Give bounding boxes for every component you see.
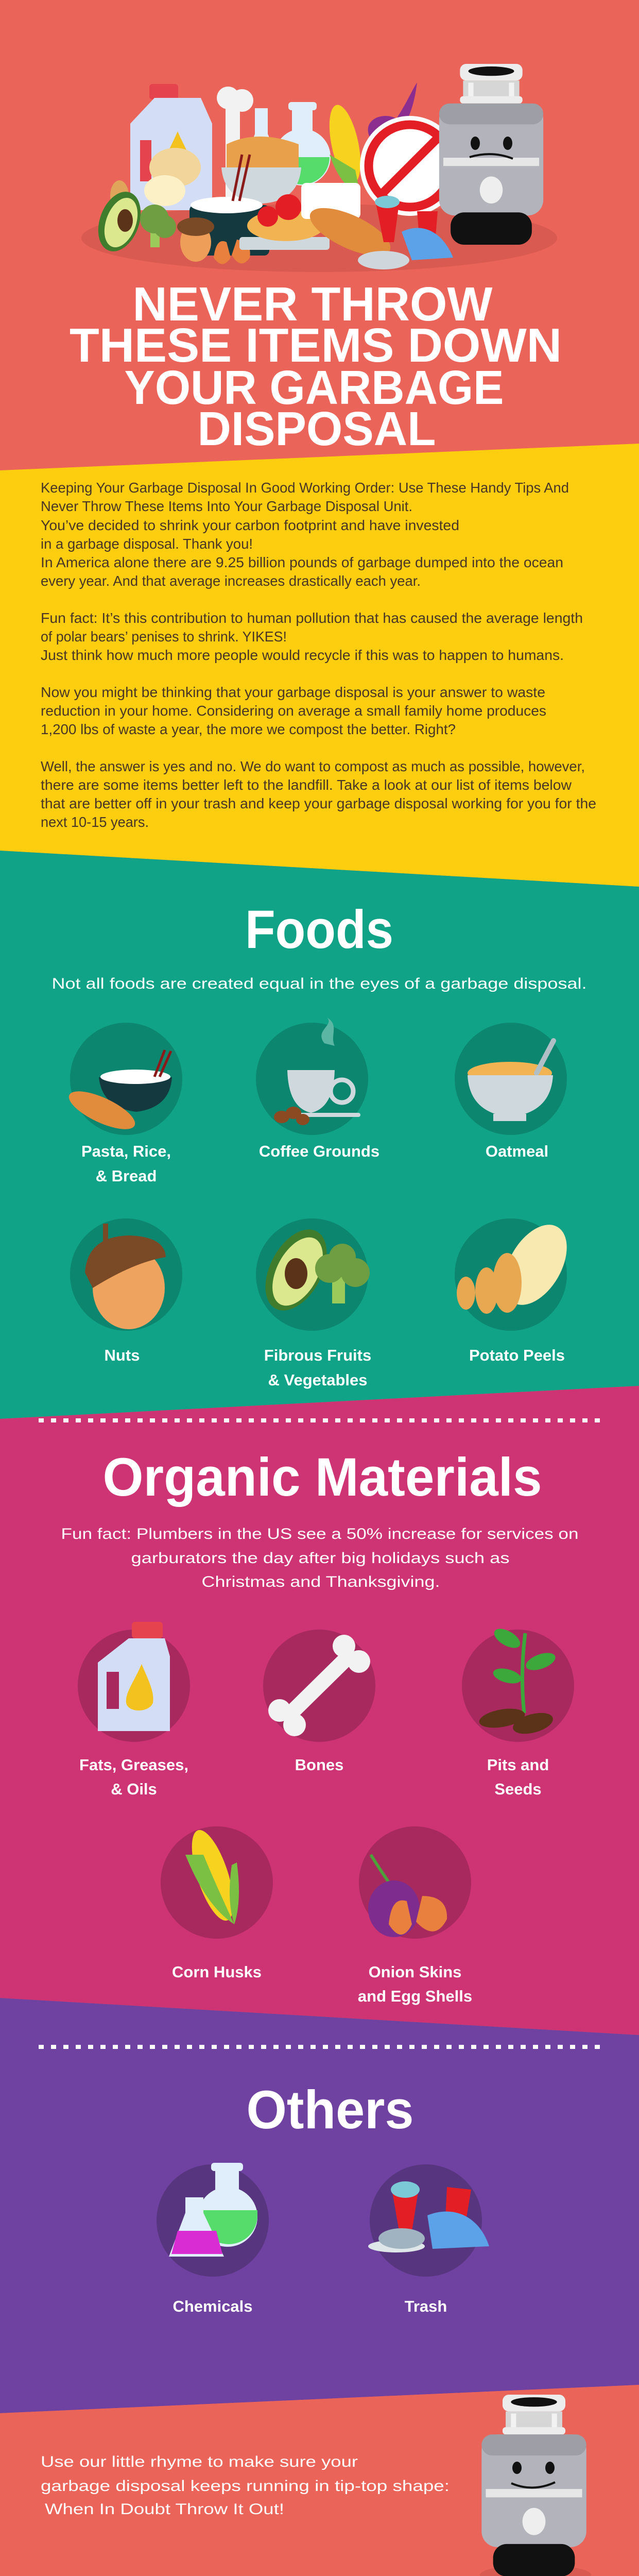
title: YOUR GARBAGE: [125, 361, 504, 414]
icon: coffee cup: [301, 183, 360, 219]
heading: Foods: Foods: [245, 900, 393, 960]
item: nuts: Nuts: [105, 1346, 140, 1364]
item: corn husks: Corn Husks: [172, 1963, 262, 1981]
intro text block: Well, the answer is yes and no. We do want to compost as much as possible, however,: [41, 758, 585, 774]
icon: avocado: [91, 186, 148, 257]
intro text block: [41, 480, 596, 830]
background: coral footer: [0, 2385, 639, 2576]
footer text: Use our little rhyme to make sure your: [41, 2453, 358, 2470]
intro text block: reduction in your home. Considering on average a small family home produces: [41, 703, 546, 719]
icon: bone: [217, 87, 253, 198]
icon: bread: [303, 198, 397, 265]
intro text block: Just think how much more people would recycle if this was to happen to humans.: [41, 647, 564, 663]
title: DISPOSAL: [198, 402, 436, 455]
icon: oatmeal bowl: [221, 137, 301, 204]
item: bones: [263, 1630, 375, 1774]
item: trash: Trash: [405, 2297, 447, 2315]
text: organic fun fact: [61, 1526, 579, 1590]
item: oatmeal: [455, 1023, 567, 1160]
item: onion skins and egg shells: and Egg Shells: [358, 1987, 472, 2005]
item: fibrous fruits vegetables: & Vegetables: [268, 1371, 367, 1389]
footer text: When In Doubt Throw It Out!: [45, 2501, 284, 2518]
item: onion skins and egg shells: [358, 1826, 472, 2005]
item: potato peels: Potato Peels: [469, 1346, 565, 1364]
item: pasta rice bread: Pasta, Rice,: [81, 1142, 171, 1160]
item: corn husks: [161, 1825, 273, 1981]
intro text block: Keeping Your Garbage Disposal In Good Working Order: Use These Handy Tips And: [41, 480, 569, 496]
item: nuts: [70, 1218, 182, 1364]
icon: flasks: [242, 102, 331, 185]
item: fats greases oils: & Oils: [111, 1780, 157, 1798]
item: fibrous fruits vegetables: [253, 1218, 371, 1389]
hero illustration: [81, 64, 557, 272]
intro text block: Fun fact: It’s this contribution to human pollution that has caused the average length: [41, 610, 583, 626]
icon: onion: [368, 82, 417, 144]
icon: spaghetti plate: [239, 194, 330, 250]
item: coffee grounds: Coffee Grounds: [259, 1142, 379, 1160]
icon: egg shells: [214, 240, 250, 264]
item: pasta rice bread: [64, 1023, 182, 1185]
item: pits and seeds: Seeds: [494, 1780, 542, 1798]
intro text block: there are some items better left to the landfill. Take a look at our list of items below: [41, 777, 572, 793]
item: trash: [368, 2164, 489, 2315]
intro text block: You’ve decided to shrink your carbon footprint and have invested: [41, 517, 459, 533]
background: purple others: [0, 1998, 639, 2413]
title: THESE ITEMS DOWN: [70, 318, 562, 372]
icon: sad garbage disposal: [439, 64, 543, 245]
text: organic fun fact: Christmas and Thanksgiving.: [202, 1573, 440, 1590]
intro text block: that are better off in your trash and keep your garbage disposal working for you for the: [41, 795, 596, 811]
footer text: garbage disposal keeps running in tip-top shape:: [41, 2478, 450, 2495]
item: oatmeal: Oatmeal: [486, 1142, 548, 1160]
intro text block: every year. And that average increases drastically each year.: [41, 573, 421, 589]
icon: trash pile: [358, 196, 453, 269]
intro text block: of polar bears’ penises to shrink. YIKES!: [41, 629, 287, 645]
item: potato peels: [455, 1214, 580, 1364]
intro text block: 1,200 lbs of waste a year, the more we compost the better. Right?: [41, 721, 456, 737]
item: chemicals: [157, 2163, 269, 2315]
icon: smiling garbage disposal: [480, 2395, 591, 2576]
item: pits and seeds: [462, 1625, 574, 1798]
intro text block: In America alone there are 9.25 billion pounds of garbage dumped into the ocean: [41, 554, 563, 570]
item: chemicals: Chemicals: [172, 2297, 253, 2315]
intro text block: next 10-15 years.: [41, 814, 149, 830]
heading: Others: Others: [246, 2080, 414, 2140]
icon: oil jug: [130, 84, 212, 210]
background: teal foods: [0, 851, 639, 1419]
text: organic fun fact: Fun fact: Plumbers in the US see a 50% increase for services on: [61, 1526, 579, 1543]
item: fats greases oils: Fats, Greases,: [79, 1756, 188, 1774]
item: pits and seeds: Pits and: [487, 1756, 549, 1774]
item: pasta rice bread: & Bread: [96, 1167, 157, 1185]
intro text block: in a garbage disposal. Thank you!: [41, 536, 253, 552]
icon: no sign: [360, 116, 460, 216]
intro text block: Never Throw These Items Into Your Garbage Disposal Unit.: [41, 498, 412, 514]
item: bones: Bones: [295, 1756, 343, 1774]
text: organic fun fact: garburators the day after big holidays such as: [131, 1550, 510, 1567]
icon: acorn: [177, 217, 214, 262]
intro text block: Now you might be thinking that your garbage disposal is your answer to waste: [41, 684, 545, 700]
item: coffee grounds: [256, 1018, 379, 1160]
subtitle: foods: Not all foods are created equal in the eyes of a garbage disposal.: [51, 975, 587, 992]
icon: rice bowl: [189, 155, 269, 256]
title: NEVER THROW: [133, 277, 493, 331]
footer text: [41, 2453, 450, 2518]
heading: Organic Materials: Organic Materials: [103, 1447, 542, 1507]
background: red header: [0, 0, 639, 470]
item: fats greases oils: [78, 1622, 190, 1798]
title: [70, 277, 562, 455]
icon: potato: [110, 148, 201, 211]
item: onion skins and egg shells: Onion Skins: [369, 1963, 461, 1981]
background: yellow intro: [0, 444, 639, 887]
background: pink organic: [0, 1386, 639, 2035]
icon: broccoli: [140, 205, 176, 247]
icon: corn: [323, 102, 367, 196]
item: fibrous fruits vegetables: Fibrous Fruits: [264, 1346, 371, 1364]
